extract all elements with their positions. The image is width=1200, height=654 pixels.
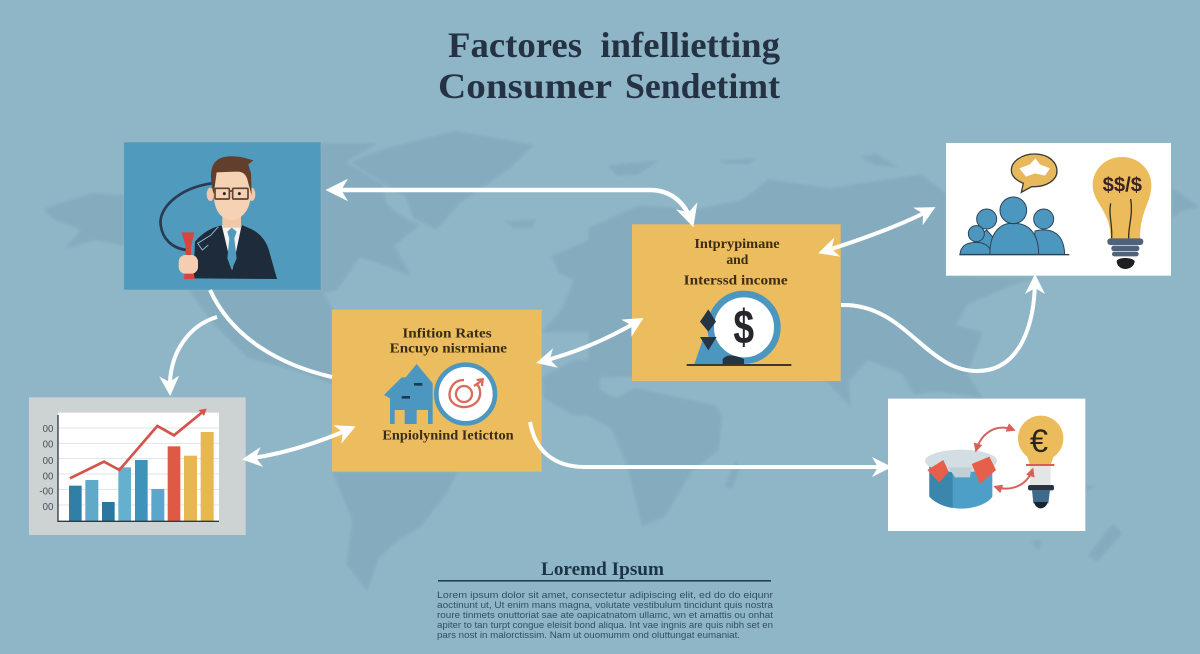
panel text: heading: and [726,252,749,267]
arrow: businessman to chart [170,317,217,392]
panel: income [632,224,841,381]
chart axis labels: 00 [43,471,53,482]
text body: pars nost in malorctissim. Nam ut ouomumm ond oluttungat eumaniat. [437,630,740,640]
icon: red handle [182,232,195,279]
panel: businessman [124,142,321,290]
arrow: income panel and sentiment panel [822,209,932,252]
title: Sendetimt [625,66,780,106]
icon: house [384,364,433,424]
arrow: businessman to income panel [330,190,692,223]
text body: Lorem ipsum dolor sit amet, consectetur adipiscing elit, ed do do eiqunr [437,590,773,600]
panel text: heading: Intprypimane [694,236,780,251]
icon: curved red arrows [976,428,1014,451]
chart axis labels: -00 [39,487,53,498]
chart axis labels [39,424,53,513]
chart axis labels: 00 [43,439,53,450]
chart trend line [70,410,205,478]
icon: head [207,188,214,201]
arrow: income panel to sentiment panel wave [841,278,1035,371]
chart bars [69,432,214,521]
title [438,25,780,106]
icon: box [929,464,992,509]
text heading: Loremd Ipsum [541,559,664,580]
title: Factores infellietting [448,25,780,65]
icon: cord [160,183,212,250]
panel: bar chart [29,397,246,535]
chart grid [58,428,219,505]
arrow: businessman to inflation panel [210,290,332,377]
icon: suit [193,225,277,279]
panel text: heading: Enpiolynind Ietictton [382,427,514,442]
chart axis labels: 00 [43,424,53,435]
icon: speech bubble [1011,154,1057,192]
arrow: inflation and income panels [540,320,640,362]
icon: people [960,197,1065,254]
panel: euro: € [1030,422,1048,459]
panel text: heading [684,236,788,288]
icon: euro bulb [1018,416,1063,461]
icon: light bulb [1093,157,1151,239]
panel text: heading: Interssd income [684,273,788,288]
panel: inflation rates [332,310,542,472]
text body [437,590,774,640]
panel text: heading: Encuyo nisrmiane [390,340,507,355]
panel text: heading [382,325,514,442]
arrow: chart and inflation panel [246,428,352,459]
chart axis labels: 00 [43,502,53,513]
text body: apiter to tan turpt congue eleisit bond aliqua. Int vae ingnis are quis nibh set en [437,620,773,630]
panel: income: $ [733,301,754,355]
icon: dollar coin [711,294,777,361]
panel: consumer sentiment: $$/$ [1103,174,1142,197]
panel: consumer sentiment [946,143,1171,276]
panel: euro [888,399,1085,531]
panel text: heading: Infition Rates [402,325,492,340]
text body: aoctinunt ut, Ut enim mans magna, volutate vestibulum tincidunt quis nostra [437,600,773,610]
text body: roure tinmets onuttoriat sae ate oapicatnatom ullamc, wn et amattis ou onhat [437,610,774,620]
chart axis labels: 00 [43,456,53,467]
icon: glasses [215,188,248,199]
title: Consumer [438,66,612,106]
arrow: inflation panel to euro panel [530,422,888,467]
world map background [44,131,1200,591]
text block: lorem ipsum [437,559,774,640]
icon: target [436,365,495,423]
